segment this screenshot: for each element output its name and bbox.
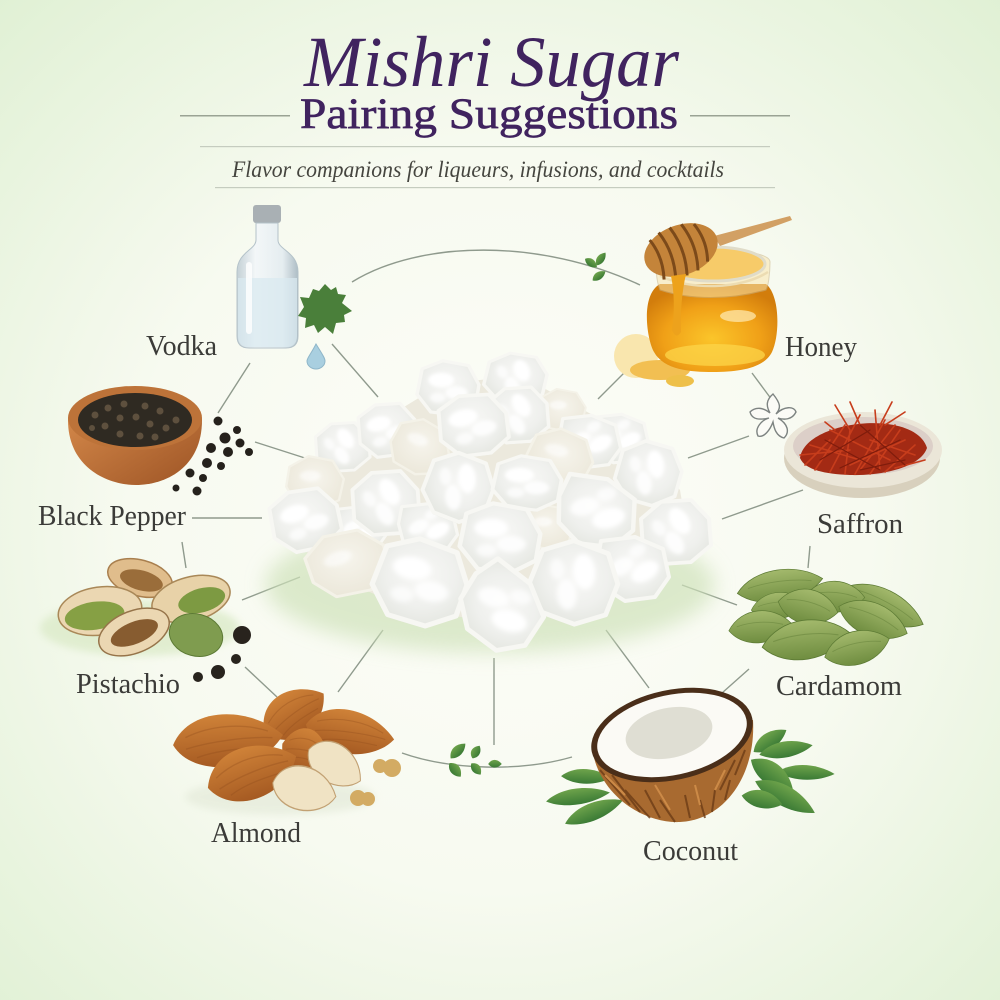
subtitle: Flavor companions for liqueurs, infusions, and cocktails: [231, 157, 724, 182]
subtitle rule top: [200, 146, 770, 147]
icon: wooden bowl: [68, 386, 202, 485]
title rule right: [690, 115, 790, 116]
label: Almond: Almond: [211, 818, 301, 849]
heading: Mishri Sugar: Mishri Sugar: [303, 22, 680, 102]
title rule left: [180, 115, 290, 116]
item: almond: [172, 676, 401, 849]
label: Vodka: Vodka: [146, 331, 218, 362]
icon: honey dipper: [637, 214, 792, 336]
item: saffron: [750, 394, 942, 540]
icon: vodka bottle: [237, 205, 298, 348]
label: Coconut: Coconut: [643, 836, 738, 867]
leaf sprig bottom: [446, 740, 502, 780]
icon: almond crumbs: [350, 759, 401, 806]
pile shadow: [265, 517, 715, 653]
connectors: [182, 250, 810, 780]
item: coconut: [545, 674, 835, 867]
icon: water drop: [307, 344, 325, 369]
heading: Pairing Suggestions: Pairing Suggestions: [300, 91, 678, 138]
item: pistachio: [40, 552, 251, 700]
item: honey: [614, 214, 857, 387]
icon: loose peppercorns: [172, 416, 253, 496]
icon: pistachios: [40, 552, 240, 665]
almond shadow: [185, 779, 375, 815]
icon: almonds: [172, 676, 398, 818]
label: Saffron: Saffron: [817, 509, 903, 540]
icon: saffron dish: [784, 402, 942, 498]
pile backing: [290, 375, 690, 625]
leaf sprig top: [583, 250, 608, 283]
item: vodka: [146, 205, 352, 369]
item: black pepper: [38, 386, 253, 532]
icon: honey puddle: [614, 334, 694, 387]
icon: herb: [298, 284, 352, 334]
title: [180, 22, 790, 188]
icon: coconut: [582, 674, 762, 822]
label: Cardamom: Cardamom: [776, 671, 902, 702]
icon: flower outline: [750, 394, 796, 438]
icon: coconut leaves: [545, 723, 835, 831]
icon: honey jar: [647, 247, 777, 372]
icon: cardamom pods: [728, 565, 930, 671]
item: cardamom: [728, 565, 930, 702]
subtitle rule bottom: [215, 187, 775, 188]
icon: scattered peppercorns: [193, 626, 251, 682]
label: Pistachio: Pistachio: [76, 669, 180, 700]
mishri crystal pile: [260, 348, 715, 667]
label: Black Pepper: Black Pepper: [38, 501, 187, 532]
label: Honey: Honey: [785, 332, 857, 363]
